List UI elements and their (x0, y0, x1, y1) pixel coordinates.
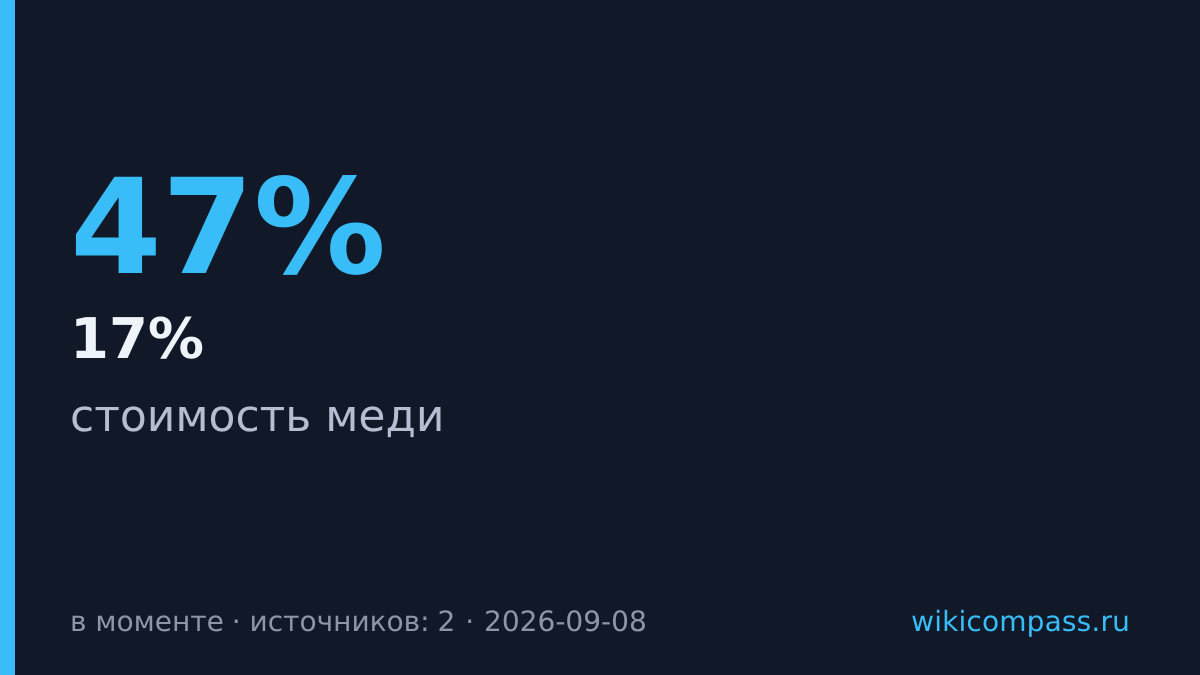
footer meta: в моменте · источников: 2 · 2026-09-08 (70, 605, 647, 638)
description: стоимость меди (70, 391, 444, 442)
footer site: wikicompass.ru (911, 605, 1130, 638)
secondary number: 17% (70, 307, 204, 372)
accent bar (0, 0, 15, 675)
big number: 47% (70, 151, 386, 305)
